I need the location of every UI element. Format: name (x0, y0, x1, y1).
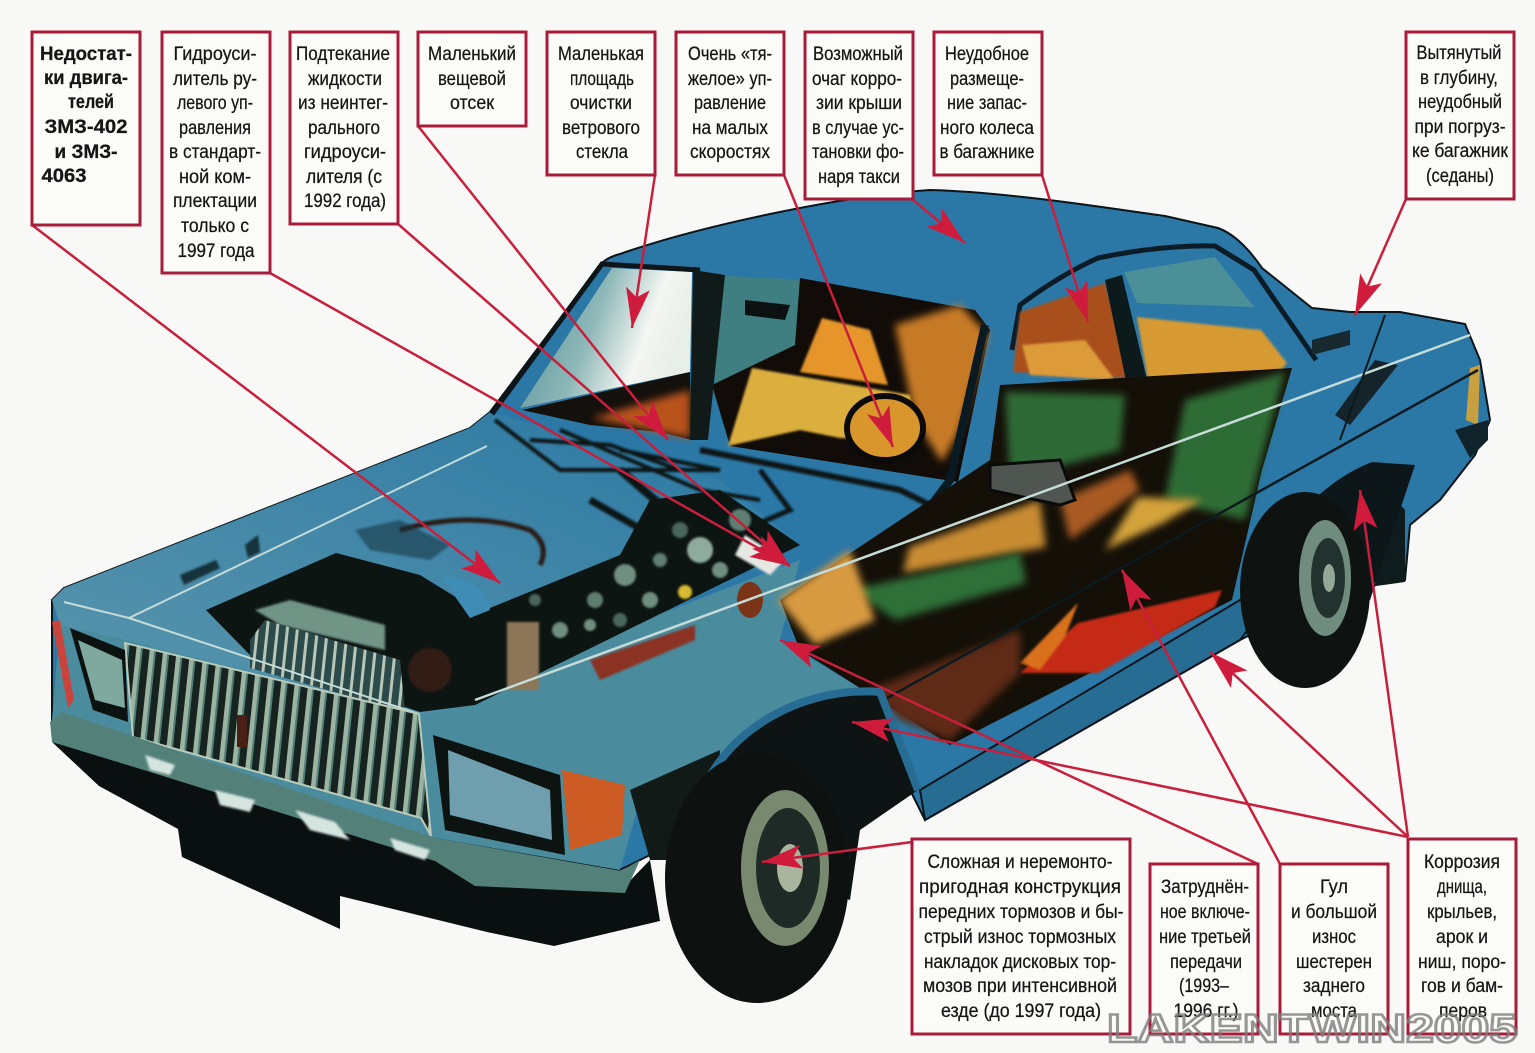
rear wheel (1240, 492, 1370, 688)
callout: rear axle: и большой (1291, 902, 1377, 923)
callout: spare wheel: ние запас- (947, 93, 1027, 114)
callout: power steering: в стандарт- (169, 142, 261, 163)
callout: power steering: только с (181, 216, 249, 237)
side window (710, 275, 805, 385)
callout: roof corrosion (805, 32, 913, 199)
callout: roof corrosion: очаг корро- (812, 69, 902, 90)
grille (125, 643, 431, 836)
green door panel (1005, 392, 1125, 480)
arrow: front brakes (762, 842, 912, 862)
callout: roof corrosion: тановки фо- (812, 142, 904, 163)
brown floor (870, 630, 1020, 740)
callout: power steering: равления (179, 118, 251, 139)
callout: trunk (1406, 32, 1514, 199)
right headlight (433, 735, 565, 855)
door frame (1012, 246, 1316, 360)
callout: fluid leak: 1992 года) (304, 191, 386, 212)
windshield frame (492, 264, 700, 414)
callout: third gear: 1996 гг.) (1174, 1001, 1238, 1022)
callout: trunk: неудобный (1418, 92, 1502, 113)
watermark: LAKENTWIN2005 (1107, 1007, 1517, 1051)
callout: corrosion: Коррозия (1424, 852, 1500, 873)
callout: spare wheel: размеще- (950, 69, 1024, 90)
callout: rear axle: Гул (1320, 877, 1348, 898)
callout: spare wheel: Неудобное (945, 44, 1029, 65)
arrow: corrosion sill (1210, 652, 1408, 837)
arrow: spare wheel (1042, 175, 1088, 322)
arrow: rear axle (1122, 570, 1280, 864)
callout: heavy steering: скоростях (690, 142, 770, 163)
brake reservoir cap (737, 582, 763, 618)
taillight (1466, 365, 1480, 425)
callout: power steering: левого уп- (177, 93, 253, 114)
blue hood patch (440, 575, 490, 618)
outside mirror (990, 460, 1075, 505)
callout: corrosion: крыльев, (1427, 902, 1497, 923)
turn signal (562, 770, 625, 850)
arrow: engines (32, 225, 500, 583)
badge (1312, 330, 1350, 355)
callout: trunk: при погруз- (1414, 117, 1506, 138)
callout: corrosion: перов (1439, 1001, 1487, 1022)
callout: windshield area: очистки (570, 93, 632, 114)
arrow: corrosion rear arch (1360, 490, 1408, 837)
left headlight (70, 628, 128, 722)
callout: fluid leak: Подтекание (296, 44, 390, 65)
callout: engine drawbacks: телей (68, 92, 114, 113)
orange seat base (1020, 603, 1078, 670)
callout: heavy steering: Очень «тя- (688, 44, 772, 65)
callout: rear axle: моста (1311, 1001, 1357, 1022)
callout: third gear: (1993– (1179, 976, 1229, 997)
hood marks (180, 520, 450, 585)
callout: third gear: передачи (1170, 952, 1242, 973)
callout: trunk: Вытянутый (1416, 43, 1502, 64)
centre pillar (690, 270, 725, 440)
callout: heavy steering: на малых (692, 118, 768, 139)
callout: roof corrosion: в случае ус- (812, 118, 904, 139)
callout: power steering: ной ком- (179, 167, 251, 188)
callout: engine drawbacks: Недостат- (40, 44, 132, 65)
callout: front brakes: мозов при интенсивной (923, 976, 1117, 997)
rear door handle (1335, 360, 1398, 425)
callout: heavy steering (676, 32, 784, 175)
arrow: roof corrosion (885, 199, 965, 243)
car body (52, 190, 1490, 870)
callout: trunk: в глубину, (1420, 68, 1498, 89)
callout: power steering: литель ру- (173, 69, 257, 90)
far rear seat (800, 318, 888, 385)
callout: corrosion: арок и (1436, 927, 1488, 948)
arrow: corrosion underbody (852, 722, 1408, 837)
callout: corrosion: днища, (1437, 877, 1487, 898)
yellow rear seat (1105, 497, 1202, 550)
arrow: trunk (1355, 199, 1406, 315)
rear mudflap (1376, 480, 1405, 586)
front arch (690, 693, 918, 900)
callout: engine drawbacks (32, 32, 140, 225)
cowl and wiper detail (400, 420, 940, 565)
callout: heavy steering: желое» уп- (688, 69, 772, 90)
door window seat (1022, 340, 1115, 380)
rear view mirror (745, 300, 790, 320)
callout: trunk: ке багажник (1412, 141, 1509, 162)
callout: front brakes: передних тормозов и бы- (918, 902, 1124, 923)
callout: front brakes: езде (до 1997 года) (941, 1001, 1101, 1022)
orange front seat (778, 550, 875, 645)
orange rear door (1060, 470, 1140, 540)
rear window upper (1124, 257, 1254, 307)
callout: windshield area: Маленькая (558, 44, 644, 65)
body lines (64, 315, 1478, 714)
car illustration (50, 190, 1490, 1003)
green mid panel (851, 553, 1026, 620)
white reservoir (735, 535, 785, 575)
callout: front brakes: стрый износ тормозных (924, 927, 1116, 948)
callout: roof corrosion: Возможный (813, 44, 903, 65)
callout: fluid leak (290, 32, 398, 224)
callout: spare wheel (934, 32, 1042, 175)
callout: rear axle (1280, 864, 1388, 1034)
front suspension (630, 750, 720, 860)
callout: windshield area: ветрового (562, 118, 640, 139)
callout: windshield area: площадь (570, 69, 634, 90)
callout: fluid leak: из неинтег- (298, 93, 388, 114)
rear bumper (1455, 420, 1488, 458)
dash orange (592, 390, 690, 438)
callout: windshield area (547, 32, 655, 175)
steering wheel (847, 396, 923, 460)
callout: third gear: ние третьей (1159, 927, 1251, 948)
sill (920, 585, 1282, 820)
callout: front brakes (912, 839, 1130, 1034)
front wheel (665, 753, 849, 1003)
left marker light (52, 620, 74, 708)
arrow: windshield wipers (632, 175, 655, 328)
interior (712, 278, 990, 482)
callout: third gear: Затруднён- (1161, 877, 1249, 898)
callout: engine drawbacks: и ЗМЗ- (54, 142, 118, 163)
arrow: steering fluid leak (398, 224, 790, 566)
callout: glove box: Маленький (428, 44, 516, 65)
engine red cover (590, 625, 695, 680)
orange panel (903, 500, 1046, 573)
engine parts (408, 509, 751, 692)
arrows (32, 126, 1408, 864)
arrow: third gear (780, 640, 1258, 864)
callout: spare wheel: в багажнике (940, 142, 1034, 163)
rear window seat (1137, 317, 1287, 392)
red floor (1020, 590, 1222, 673)
callout: heavy steering: равление (694, 93, 766, 114)
callout: corrosion: ниш, поро- (1418, 952, 1506, 973)
front door window (1013, 283, 1130, 378)
callout: glove box: отсек (450, 93, 495, 114)
B pillar (1105, 275, 1150, 400)
callout: fluid leak: лителя (с (306, 167, 382, 188)
callout: power steering (162, 32, 270, 273)
arrow: glove box (418, 126, 668, 440)
A pillar (920, 325, 985, 520)
rear arch (1250, 462, 1415, 600)
callout: rear axle: заднего (1303, 976, 1365, 997)
callout: corrosion (1408, 839, 1516, 1034)
front fascia (52, 560, 880, 870)
bumper chrome (50, 712, 640, 893)
callout: front brakes: Сложная и неремонто- (928, 852, 1112, 873)
radiator (250, 620, 405, 712)
callout: roof corrosion: наря такси (818, 167, 900, 188)
callout: windshield area: стекла (576, 142, 628, 163)
callout: power steering: плектации (173, 191, 257, 212)
callout: roof corrosion: зии крыши (816, 93, 902, 114)
windshield (520, 268, 692, 408)
far front seat (895, 305, 988, 462)
callout: fluid leak: гидроуси- (304, 142, 386, 163)
callout: glove box: вещевой (438, 69, 506, 90)
callout: spare wheel: ного колеса (940, 118, 1034, 139)
bumper dark band (52, 742, 660, 946)
bumper highlights (145, 755, 430, 860)
callout: fluid leak: жидкости (308, 69, 382, 90)
green rear panel (1165, 372, 1285, 520)
callout: rear axle: износ (1312, 927, 1356, 948)
callout: corrosion: гов и бам- (1421, 976, 1503, 997)
callout: fluid leak: рального (308, 118, 380, 139)
side interior see-through (780, 368, 1292, 745)
oil filter (507, 622, 539, 690)
near seat (728, 368, 916, 446)
callout: engine drawbacks: ЗМЗ-402 (44, 117, 128, 138)
callout: power steering: Гидроуси- (174, 44, 256, 65)
callout: front brakes: накладок дисковых тор- (924, 952, 1116, 973)
hood (52, 412, 800, 715)
air cleaner (255, 600, 385, 650)
callout: glove box (418, 32, 526, 126)
callout: engine drawbacks: ки двига- (44, 68, 128, 89)
engine bay (206, 490, 800, 712)
callout: engine drawbacks: 4063 (42, 166, 86, 187)
dash (522, 372, 692, 440)
arrow: power steering (270, 273, 790, 566)
callout: third gear (1150, 864, 1258, 1034)
arrow: heavy steering (784, 175, 893, 447)
callout: front brakes: пригодная конструкция (919, 877, 1121, 898)
callout: third gear: ное включе- (1160, 902, 1250, 923)
callout: power steering: 1997 года (178, 241, 255, 262)
grille emblem (237, 715, 247, 747)
callout: rear axle: шестерен (1296, 952, 1372, 973)
callout: trunk: (седаны) (1426, 166, 1494, 187)
